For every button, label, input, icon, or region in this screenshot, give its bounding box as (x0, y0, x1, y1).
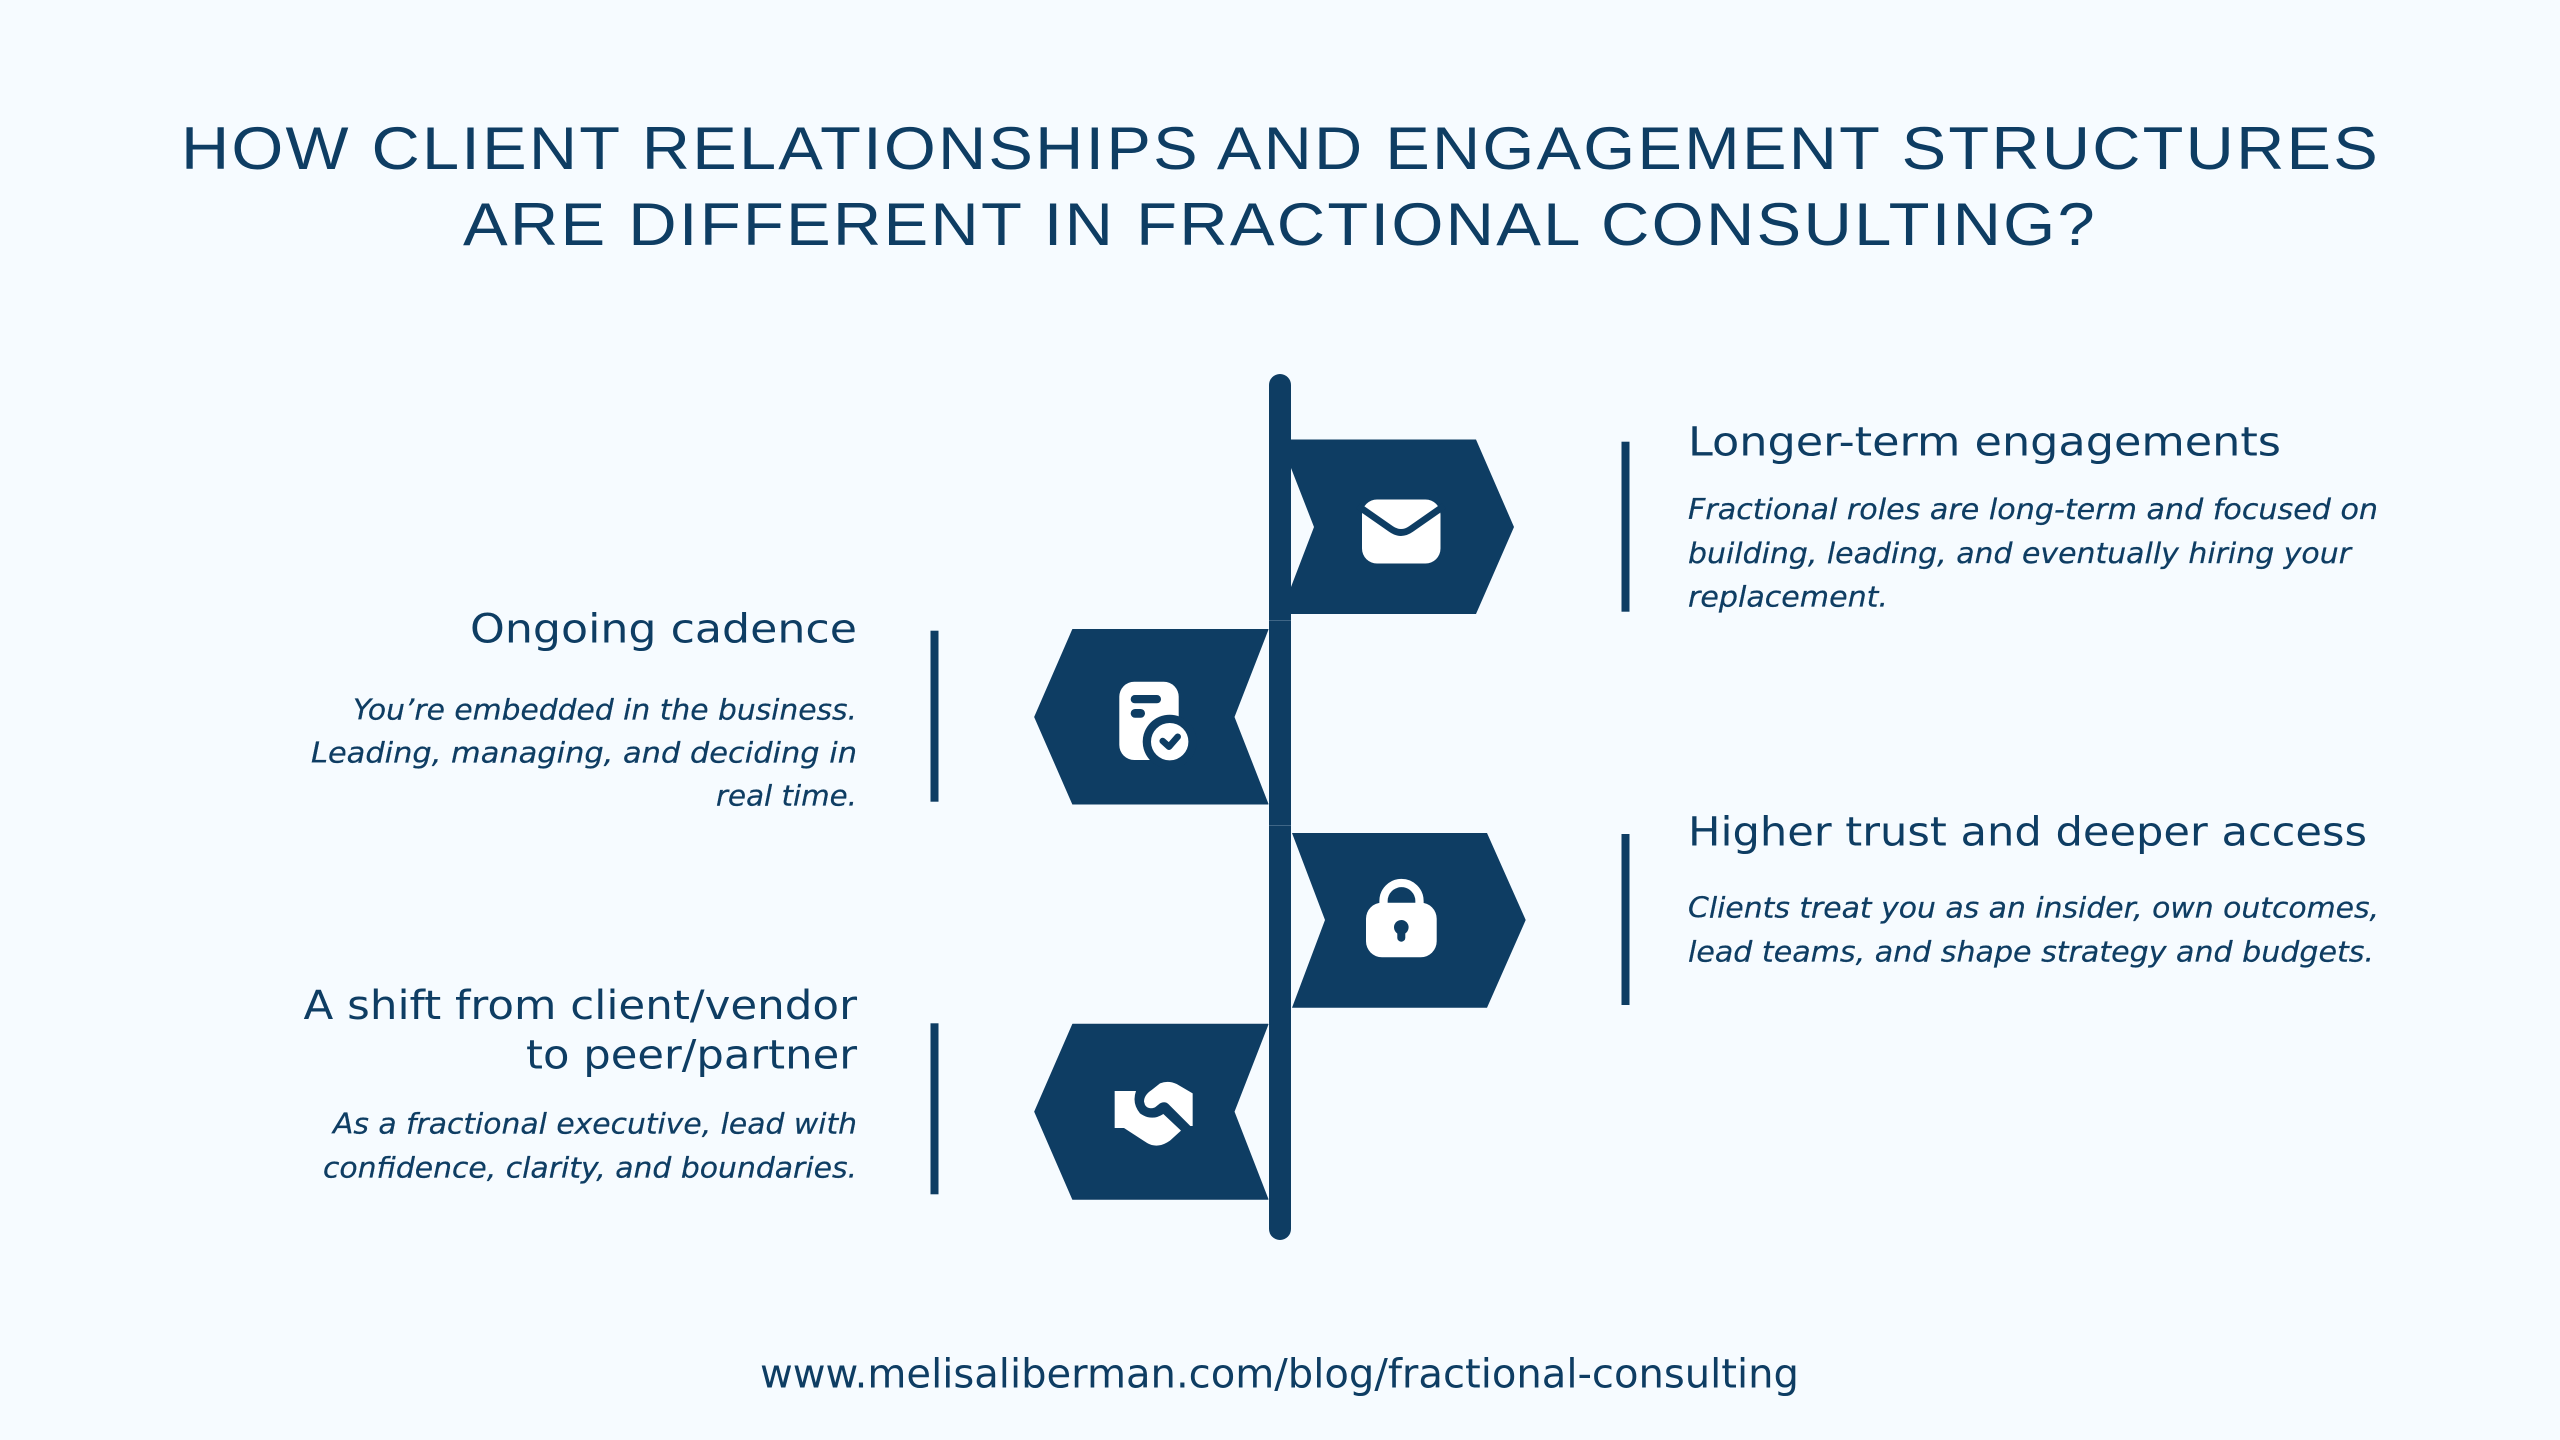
panel: ongoing cadence: You’re embedded in the business. (353, 693, 857, 726)
title: HOW CLIENT RELATIONSHIPS AND ENGAGEMENT STRUCTURES (181, 115, 2380, 182)
pole seams (1269, 620, 1291, 826)
panel: ongoing cadence (311, 606, 938, 813)
icon: padlock (1366, 883, 1437, 957)
panel: longer-term engagements (1622, 420, 2378, 614)
panel: ongoing cadence: Ongoing cadence (470, 606, 857, 652)
icon: envelope (1358, 500, 1444, 564)
panel: shift from client/vendor: A shift from client/vendor (304, 983, 858, 1029)
icon: document with check (1119, 682, 1197, 769)
panel: shift from client/vendor (304, 983, 938, 1194)
panel: shift from client/vendor: confidence, clarity, and boundaries. (323, 1151, 857, 1184)
icon: handshake (1115, 1082, 1193, 1146)
title: ARE DIFFERENT IN FRACTIONAL CONSULTING? (463, 191, 2097, 258)
panel: higher trust and deeper access: Higher trust and deeper access (1688, 810, 2367, 856)
panel: higher trust and deeper access: lead teams, and shape strategy and budgets. (1688, 936, 2374, 969)
panel: longer-term engagements: Longer-term engagements (1688, 420, 2281, 466)
flag: longer-term engagements (1291, 440, 1514, 614)
title (181, 115, 2380, 258)
panel: shift from client/vendor: to peer/partner (526, 1032, 858, 1078)
panel: longer-term engagements: building, leading, and eventually hiring your (1688, 537, 2353, 570)
panel: ongoing cadence: Leading, managing, and deciding in (311, 737, 857, 770)
flag: peer partner (1035, 1024, 1268, 1199)
panel: longer-term engagements: Fractional roles are long-term and focused on (1688, 493, 2378, 526)
flag: ongoing cadence (1035, 630, 1268, 804)
footer url: www.melisaliberman.com/blog/fractional-consulting (760, 1352, 1799, 1398)
panel: higher trust and deeper access (1622, 810, 2379, 1005)
flag: higher trust (1292, 833, 1526, 1008)
panel: ongoing cadence: real time. (716, 780, 857, 813)
timeline pole (1269, 374, 1291, 1240)
panel: higher trust and deeper access: Clients treat you as an insider, own outcomes, (1688, 892, 2379, 925)
panel: shift from client/vendor: As a fractional executive, lead with (331, 1107, 857, 1140)
panel: longer-term engagements: replacement. (1688, 581, 1888, 614)
